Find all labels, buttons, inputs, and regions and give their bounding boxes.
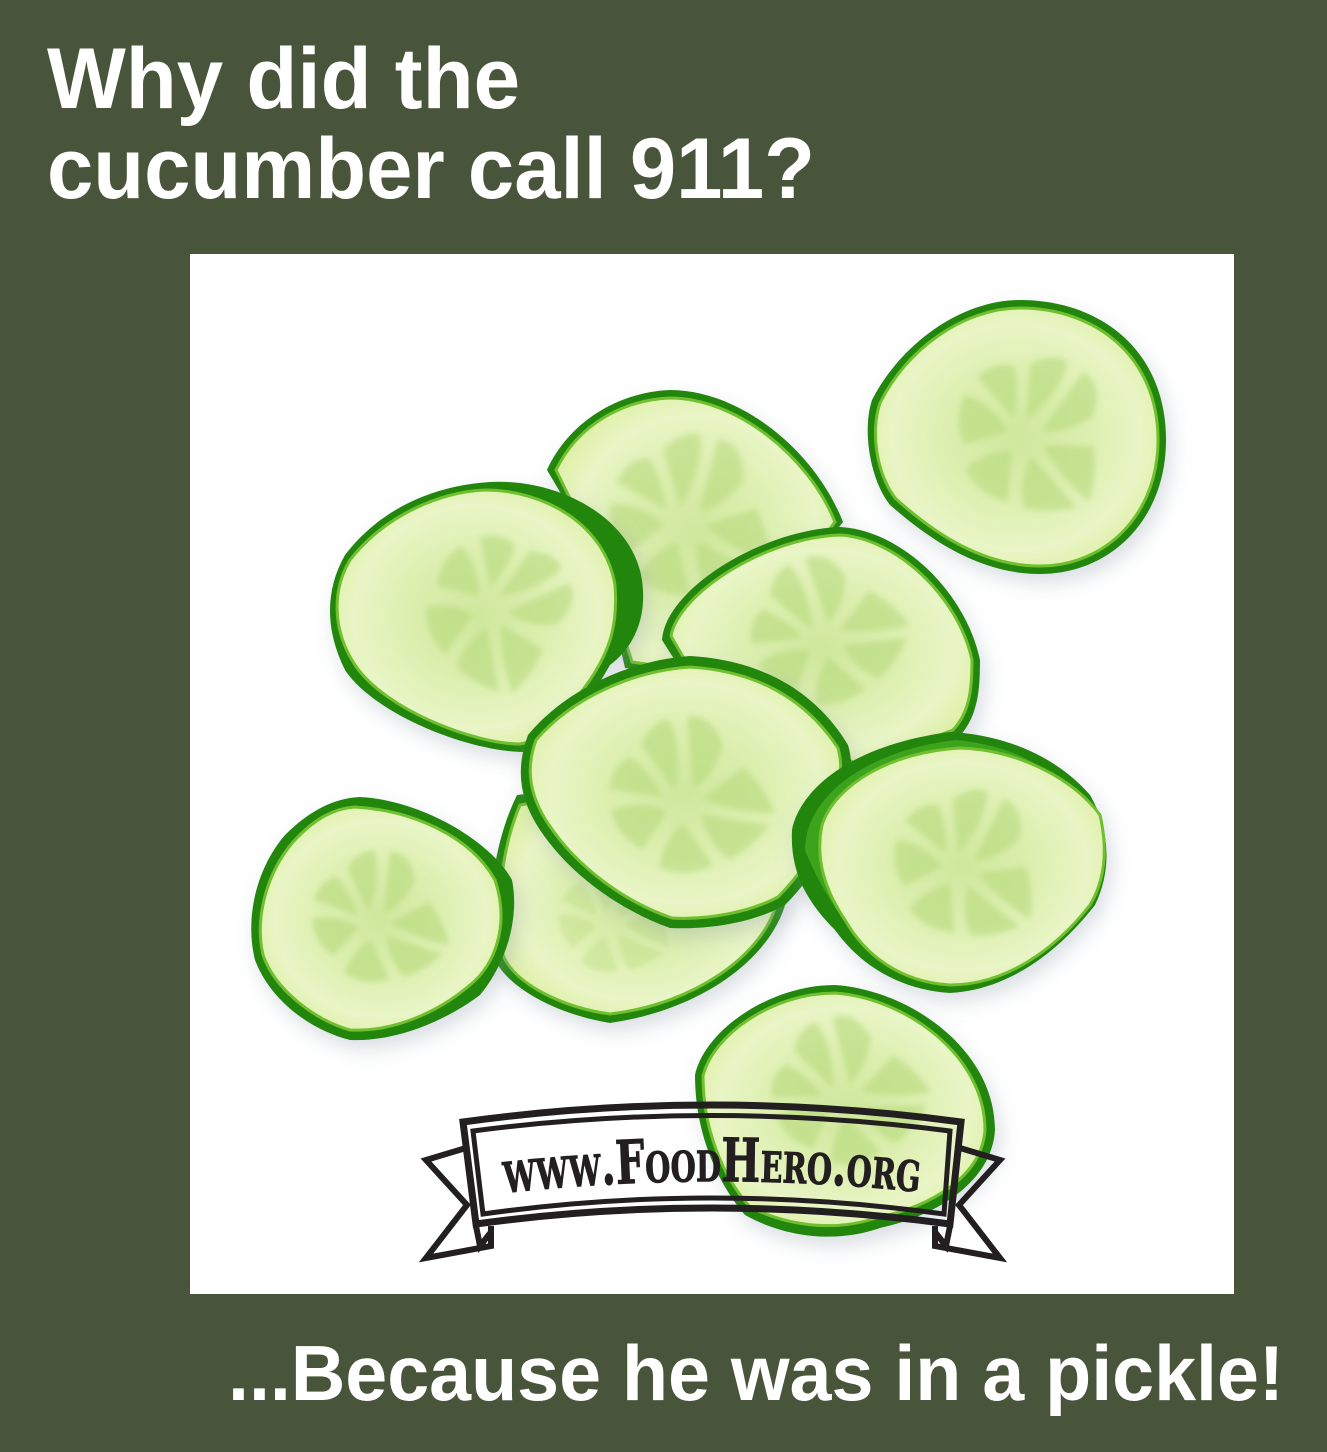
banner frame — [463, 1105, 961, 1224]
title — [47, 31, 815, 217]
slice: center — [521, 656, 851, 928]
cucumber slices — [251, 300, 1166, 1237]
slice: right middle — [662, 527, 980, 770]
punchline: ...Because he was in a pickle! — [228, 1329, 1284, 1417]
slice: right — [792, 732, 1106, 993]
logo banner — [418, 1102, 1008, 1262]
slice: bottom middle — [491, 780, 786, 1023]
photo panel — [190, 254, 1234, 1294]
logo banner: www.FoodHero.org — [501, 1136, 920, 1193]
logo text — [505, 1181, 920, 1193]
slice: top right — [868, 300, 1166, 574]
slice: left large — [330, 482, 643, 752]
title: Why did the — [47, 31, 520, 127]
slice: left small — [251, 797, 514, 1040]
ribbon tails — [426, 1148, 1000, 1258]
title: cucumber call 911? — [47, 121, 815, 217]
slice: bottom — [695, 985, 995, 1237]
slice: top middle — [547, 390, 843, 680]
